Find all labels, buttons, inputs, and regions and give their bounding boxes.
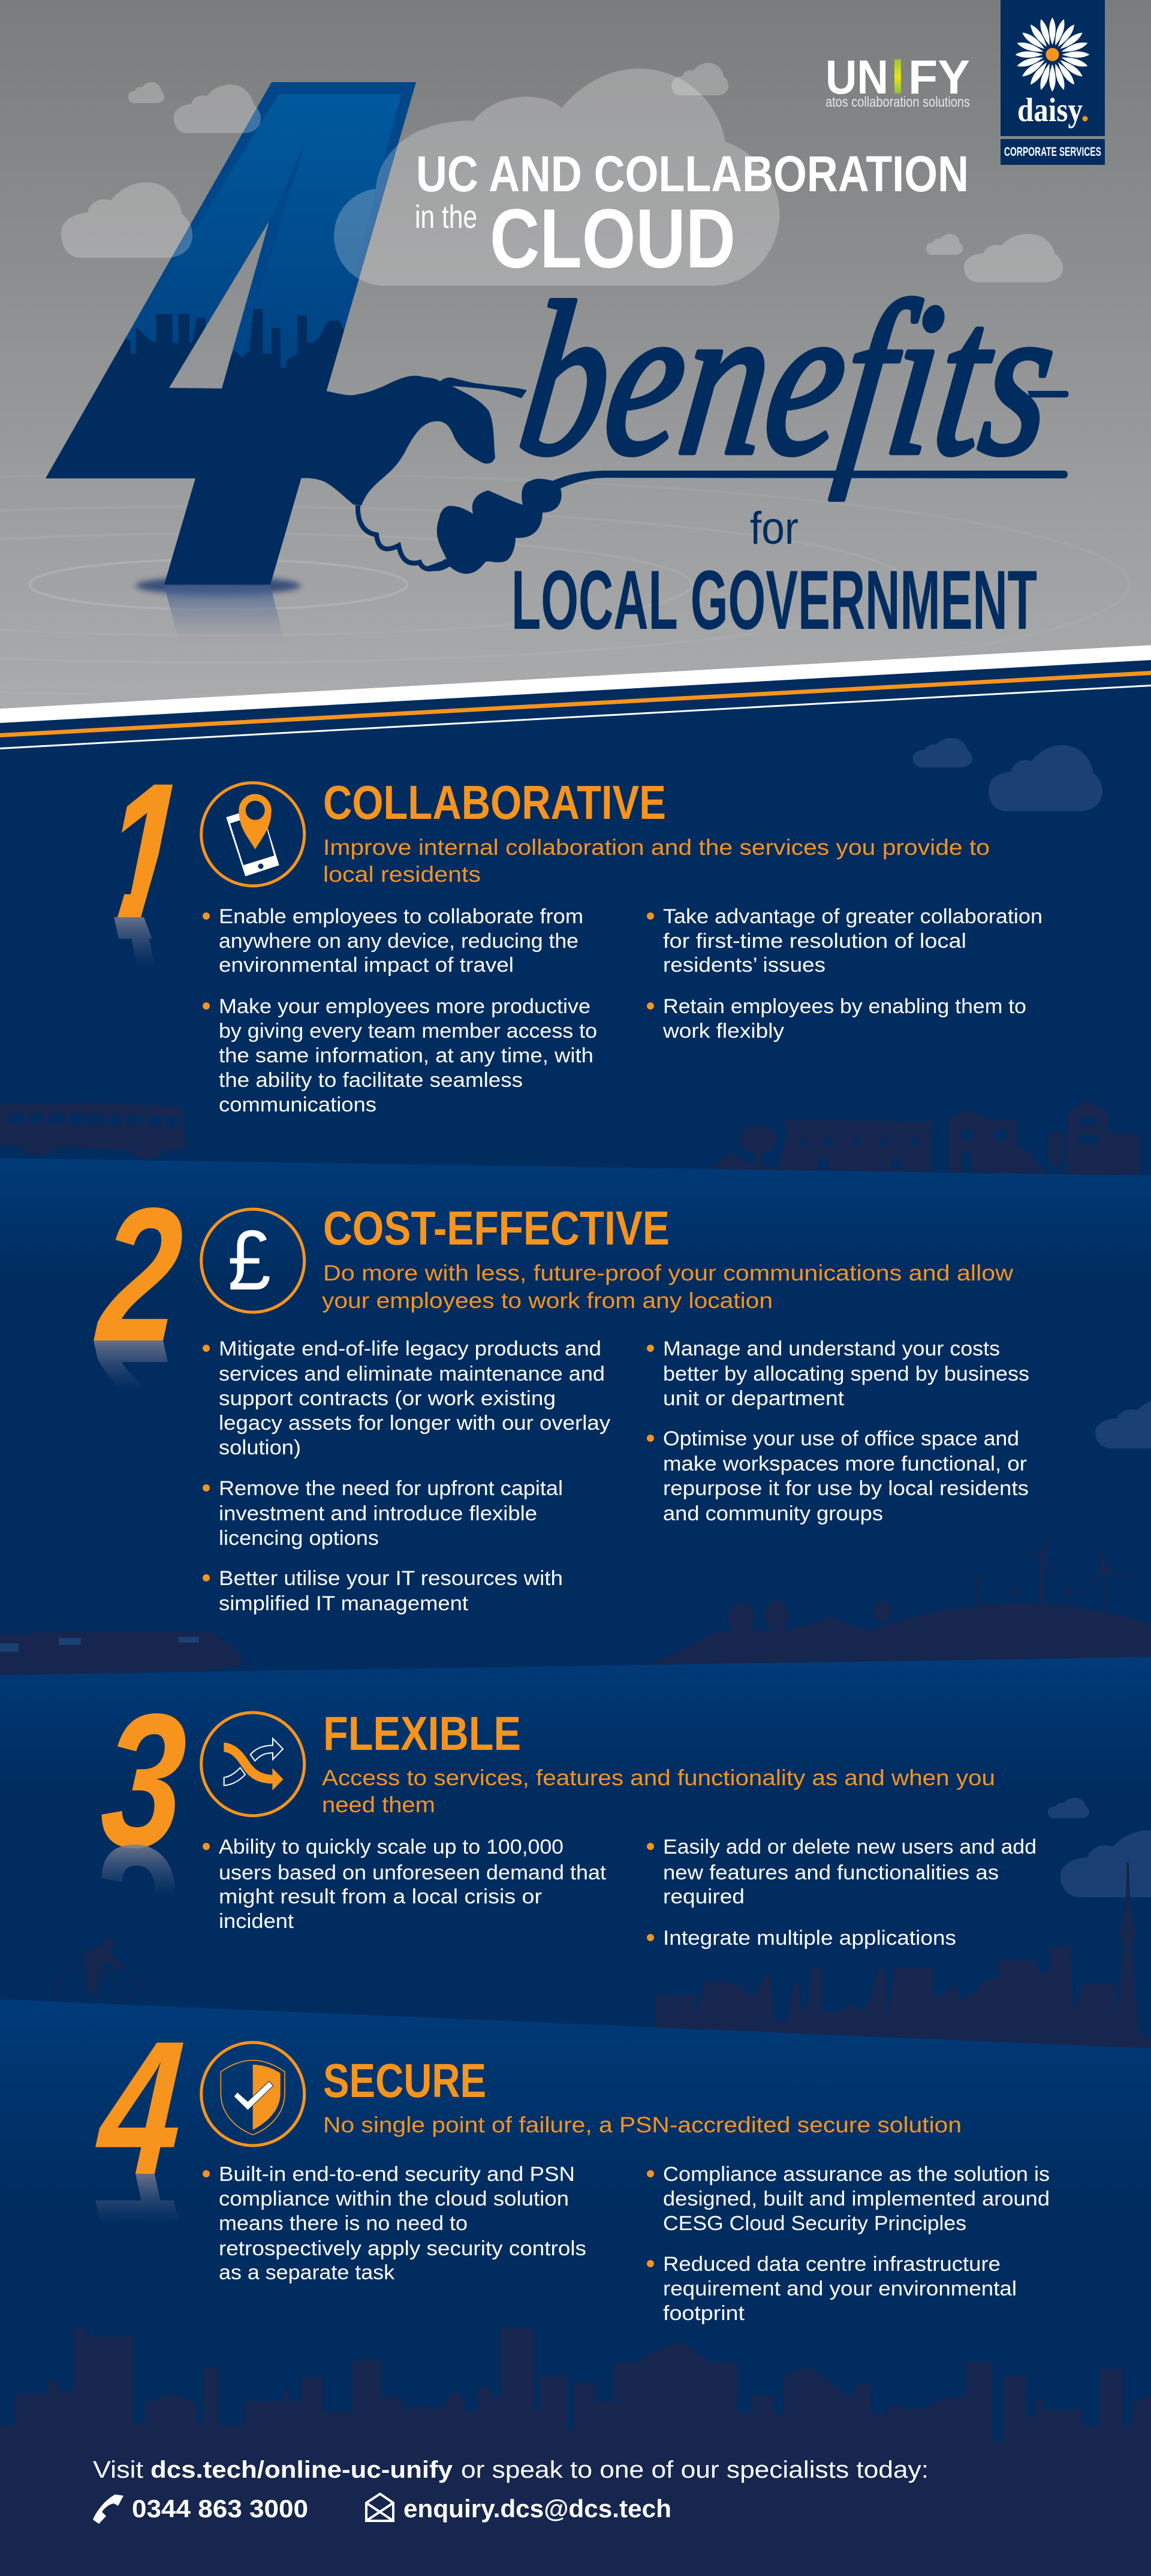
background clouds (913, 738, 1102, 811)
bullets column 1: Mitigate end-of-life legacy products and (219, 1337, 601, 1360)
panel: benefit 1 collaborative (0, 738, 1139, 1179)
bullets column 2: for first-time resolution of local (663, 930, 966, 953)
subheading: Access to services, features and functionality as and when you (322, 1765, 995, 1790)
numeral 4: 4 (89, 2002, 189, 2215)
heading: FLEXIBLE (323, 1707, 521, 1760)
panel: header (0, 0, 1151, 749)
subheading: Do more with less, future-proof your communications and allow (323, 1261, 1013, 1285)
heading: SECURE (323, 2054, 486, 2107)
bullets column 2: Easily add or delete new users and add (663, 1836, 1036, 1858)
subheading (323, 835, 990, 887)
background clouds (1048, 1798, 1151, 1897)
subheading: No single point of failure, a PSN-accredited secure solution (323, 2113, 962, 2137)
call to action line: or speak to one of our specialists today: (461, 2457, 929, 2483)
bullets column 2 (647, 905, 1042, 1043)
bullets column 1: Ability to quickly scale up to 100,000 (219, 1836, 564, 1858)
subheading: Improve internal collaboration and the services you provide to (323, 835, 990, 860)
icon: shield with check (201, 2042, 305, 2146)
logo: unify: atos collaboration solutions (825, 94, 970, 110)
phone number: 0344 863 3000 (132, 2494, 308, 2523)
bullets column 1: legacy assets for longer with our overlay (219, 1412, 610, 1435)
big numeral 4 with skyline (44, 82, 416, 596)
reflection of numeral 4 (164, 586, 285, 644)
bullets column 2: and community groups (663, 1502, 883, 1525)
heading: COLLABORATIVE (323, 776, 666, 829)
title: CLOUD (490, 191, 736, 285)
subheading: need them (322, 1792, 435, 1817)
bullets column 2: unit or department (663, 1387, 845, 1410)
bullets column 2: repurpose it for use by local residents (663, 1477, 1029, 1500)
bullets column 2 (647, 1337, 1029, 1525)
icon: phone with location pin (201, 783, 305, 886)
bullets column 1 (203, 1337, 610, 1615)
panel: benefit 2 cost-effective (0, 1158, 1151, 1676)
cyclist silhouette (56, 1939, 138, 2003)
bullets column 2: make workspaces more functional, or (663, 1453, 1027, 1475)
logo: daisy: daisy (1017, 92, 1083, 129)
bullets column 1: Make your employees more productive (219, 995, 590, 1018)
bullets column 1: Remove the need for upfront capital (219, 1477, 563, 1500)
numeral 1: 1 (100, 745, 187, 958)
panel: benefit 4 secure (0, 1999, 1151, 2346)
bullets column 1: as a separate task (219, 2261, 395, 2284)
train silhouette (0, 1620, 241, 1676)
bullets column 1: environmental impact of travel (219, 954, 514, 977)
houses silhouette (712, 1100, 1139, 1179)
logo: unify (825, 50, 970, 110)
numeral 2: 2 (91, 1168, 188, 1381)
handshake silhouette (288, 376, 1068, 574)
title: UC AND COLLABORATION (416, 146, 969, 202)
bullets column 1: the ability to facilitate seamless (219, 1069, 523, 1092)
diagonal band stripes (0, 645, 1151, 749)
bullets column 1: simplified IT management (219, 1592, 469, 1615)
bullets column 1: communications (219, 1093, 376, 1116)
bullets column 2: work flexibly (662, 1020, 784, 1043)
bullets column 2: Compliance assurance as the solution is (663, 2163, 1050, 2186)
subheading: your employees to work from any location (322, 1288, 773, 1313)
hill and wind turbines silhouette (644, 1528, 1151, 1665)
bullets column 2: Retain employees by enabling them to (663, 995, 1026, 1018)
numeral 3: 3 (95, 1674, 192, 1887)
bullets column 1: Built-in end-to-end security and PSN (219, 2163, 575, 2186)
logo: daisy: CORPORATE SERVICES (1004, 145, 1101, 159)
icon: envelope (366, 2494, 393, 2521)
bullets column 1: might result from a local crisis or (219, 1885, 542, 1908)
bullets column 2: residents’ issues (663, 954, 825, 977)
bullets column 1: support contracts (or work existing (219, 1387, 556, 1410)
bullets column 1 (203, 905, 597, 1116)
icon: pound sign (201, 1209, 305, 1312)
icon: crossing arrows (201, 1713, 305, 1816)
bullets column 1: licencing options (219, 1527, 379, 1550)
bullets column 1: by giving every team member access to (219, 1020, 597, 1043)
bullets column 1: investment and introduce flexible (219, 1502, 537, 1525)
call to action line: Visit (93, 2457, 143, 2483)
subheading (322, 1765, 995, 1817)
bullets column 2: better by allocating spend by business (663, 1363, 1029, 1385)
email address: enquiry.dcs@dcs.tech (403, 2494, 671, 2523)
background cloud (1095, 1398, 1151, 1448)
bullets column 1: the same information, at any time, with (219, 1044, 593, 1067)
bullets column 2: requirement and your environmental (663, 2277, 1017, 2300)
bullets column 1: incident (219, 1910, 294, 1933)
title: in the (415, 199, 477, 235)
shadow under numeral 4 (135, 577, 301, 595)
heading: COST-EFFECTIVE (323, 1201, 670, 1255)
logo: unify: FY (908, 50, 970, 104)
title (415, 146, 969, 285)
panel: benefit 3 flexible (0, 1657, 1151, 2053)
icon: phone (93, 2494, 123, 2524)
bullets column 1 (203, 2163, 586, 2284)
bullets column 1: means there is no need to (219, 2212, 468, 2235)
panel: footer (0, 2327, 1151, 2576)
numeral 1 reflection: 1 (100, 876, 187, 1089)
logo: unify: UN (825, 50, 888, 104)
logo: daisy (1001, 0, 1105, 165)
bullets column 1 (203, 1836, 607, 1933)
bullets column 2: designed, built and implemented around (663, 2188, 1050, 2210)
subheading: local residents (323, 862, 481, 887)
city skyline silhouette (0, 2327, 1151, 2576)
bullets column 2: required (663, 1885, 745, 1908)
city skyline and tower silhouette (655, 1862, 1151, 2053)
numeral 4 reflection: 4 (89, 2133, 189, 2346)
bullets column 1: retrospectively apply security controls (219, 2237, 586, 2260)
water ripples (28, 559, 408, 610)
call to action line (93, 2457, 929, 2483)
bullets column 1: services and eliminate maintenance and (219, 1363, 605, 1385)
bullets column 2 (647, 2163, 1050, 2325)
bullets column 1: users based on unforeseen demand that (219, 1861, 607, 1884)
bullets column 2: Optimise your use of office space and (663, 1427, 1019, 1450)
bullets column 1: Enable employees to collaborate from (219, 905, 583, 928)
bullets column 2: Integrate multiple applications (663, 1927, 956, 1950)
subheading (322, 1261, 1013, 1313)
bullets column 2: Reduced data centre infrastructure (663, 2253, 1001, 2276)
bullets column 2: new features and functionalities as (663, 1861, 999, 1884)
bullets column 1: solution) (219, 1436, 301, 1459)
bullets column 2 (647, 1836, 1036, 1950)
numeral 2 reflection: 2 (91, 1300, 188, 1513)
daisy petals (1016, 17, 1090, 92)
bullets column 1: anywhere on any device, reducing the (219, 930, 578, 953)
call to action line: dcs.tech/online-uc-unify (150, 2457, 453, 2483)
clouds (61, 63, 1063, 286)
bullets column 2: footprint (663, 2302, 745, 2325)
bullets column 2: CESG Cloud Security Principles (663, 2212, 966, 2235)
bullets column 1: compliance within the cloud solution (219, 2188, 569, 2210)
icon: pound sign: £ (228, 1213, 271, 1308)
bus silhouette (0, 1103, 186, 1159)
numeral 3 reflection: 3 (95, 1806, 192, 2018)
bullets column 1: Better utilise your IT resources with (219, 1567, 563, 1590)
bullets column 2: Take advantage of greater collaboration (663, 905, 1042, 928)
for: for (750, 503, 799, 554)
bullets column 2: Manage and understand your costs (663, 1337, 1000, 1360)
